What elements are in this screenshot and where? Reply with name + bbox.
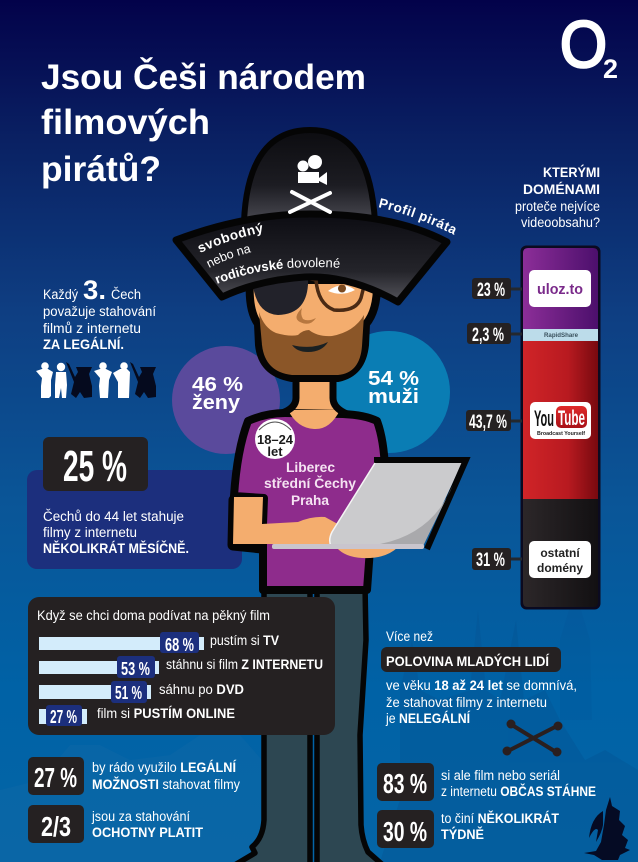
nose	[296, 308, 316, 324]
value: 2,3 %	[467, 323, 511, 346]
bar: TV: pustím si TV	[210, 633, 279, 648]
value: 31 %	[472, 548, 511, 571]
neck	[290, 372, 340, 414]
stat: 30 percent: to činí NĚKOLIKRÁT	[441, 811, 560, 826]
arm outline	[233, 500, 345, 548]
heading: domains	[515, 165, 600, 230]
eye	[328, 285, 355, 294]
title: pirátů?	[41, 150, 161, 189]
pirate hat	[172, 127, 450, 306]
text: every third: považuje stahování	[43, 304, 156, 319]
pirate figure	[172, 127, 470, 862]
segment: YouTube: You	[534, 406, 554, 431]
bar: TV: 68 %	[165, 635, 194, 655]
segment: other domains: ostatní	[540, 546, 580, 560]
bar: online: 27 %	[50, 707, 77, 727]
stat: 83 percent	[377, 763, 596, 801]
circle: men: 54 %	[368, 368, 419, 390]
circle: women: 46 %	[192, 374, 243, 396]
bar: DVD	[39, 681, 244, 703]
title: Jsou Češi národem	[41, 57, 366, 97]
circle: women: ženy	[192, 392, 241, 414]
circle: men	[328, 331, 450, 453]
bar: internet: 53 %	[121, 659, 150, 679]
mouth	[292, 342, 328, 352]
text: every third: Čech	[111, 287, 141, 302]
segment: uloz.to	[529, 270, 591, 307]
segment: YouTube	[530, 402, 591, 439]
brim text: rodičovské dovolené	[215, 258, 340, 284]
neck outline	[282, 374, 347, 414]
value: 43,7 %	[466, 410, 511, 433]
segment: other domains: domény	[537, 561, 583, 575]
circle: men: muži	[368, 386, 419, 408]
panel: 25 percent: NĚKOLIKRÁT MĚSÍČNĚ.	[43, 541, 189, 556]
value: 2,3 %: 2,3 %	[472, 325, 504, 346]
stat: 27 percent: by rádo využilo LEGÁLNÍ	[92, 760, 237, 775]
laptop hand	[337, 548, 397, 558]
laptop	[272, 460, 466, 549]
profile label: Profil piráta	[378, 198, 456, 235]
age badge: 18–24	[257, 432, 294, 447]
regions	[264, 460, 357, 508]
title	[41, 57, 366, 189]
text: half of young people	[381, 629, 577, 726]
segment: YouTube: Broadcast Yourself	[537, 431, 585, 437]
city skyline silhouette	[380, 590, 638, 862]
stat: two thirds: OCHOTNY PLATIT	[92, 825, 204, 840]
bar: TV	[39, 632, 279, 655]
text: every third: filmů z internetu	[43, 321, 141, 336]
stat: 27 percent: MOŽNOSTI stahovat filmy	[92, 777, 240, 792]
brim text: svobodný	[198, 222, 262, 252]
regions: Praha	[291, 493, 329, 508]
age badge: let	[267, 444, 283, 459]
stat: 30 percent	[377, 810, 560, 848]
text: half of young people: Více než	[386, 629, 433, 644]
stat: 30 percent: 30 %	[383, 816, 427, 847]
stat: 83 percent: si ale film nebo seriál	[441, 768, 560, 783]
heading: domains: proteče nejvíce	[515, 199, 600, 214]
circle: women	[172, 346, 280, 454]
stat: two thirds: 2/3	[41, 811, 71, 842]
panel: home film bar chart	[28, 597, 335, 735]
bar: online	[39, 705, 235, 727]
age badge	[255, 419, 295, 459]
text: every third	[43, 275, 156, 352]
segment: YouTube: Tube	[558, 407, 585, 430]
panel: 25 percent: Čechů do 44 let stahuje	[43, 509, 184, 524]
glasses	[307, 278, 373, 310]
text: every third: 3.	[83, 275, 106, 305]
legs	[233, 585, 384, 862]
stat: 30 percent: TÝDNĚ	[441, 827, 484, 842]
bar: internet: stáhnu si film Z INTERNETU	[166, 657, 323, 672]
neckline	[288, 410, 340, 429]
value: 43,7 %: 43,7 %	[469, 412, 507, 433]
segment: RapidShare: RapidShare	[544, 333, 579, 339]
stat: 83 percent: z internetu OBČAS STÁHNE	[441, 784, 596, 799]
eye patch	[252, 276, 308, 315]
stat: 27 percent: 27 %	[34, 762, 77, 793]
chart: domain stacked bar	[466, 246, 600, 610]
text: half of young people: POLOVINA MLADÝCH LIDÍ	[386, 654, 550, 669]
text: half of young people: je NELEGÁLNÍ	[385, 711, 471, 726]
icon: crossbones	[290, 192, 330, 212]
icon: people silhouettes	[36, 362, 156, 398]
bar: DVD: 51 %	[115, 683, 142, 703]
text: half of young people: ve věku 18 až 24 let se domnívá,	[386, 678, 577, 693]
arm	[233, 497, 345, 544]
left skyline silhouette	[0, 735, 262, 862]
value: 23 %: 23 %	[477, 280, 505, 301]
text: every third: ZA LEGÁLNÍ.	[43, 337, 124, 352]
panel: 25 percent: 25 %	[63, 442, 127, 491]
stat: 27 percent	[28, 757, 240, 795]
panel: 25 percent: filmy z internetu	[43, 525, 137, 540]
logo O2: O	[560, 7, 607, 81]
regions: Liberec	[286, 460, 335, 475]
heading: domains: KTERÝMI	[543, 165, 600, 180]
logo O2: 2	[603, 54, 618, 84]
t-shirt	[234, 413, 385, 590]
connector lines	[511, 289, 522, 559]
stat: 83 percent: 83 %	[383, 768, 427, 799]
panel: home film bar chart: Když se chci doma podívat na pěkný film	[37, 608, 270, 623]
value: 23 %	[472, 278, 511, 301]
bar: online: film si PUSTÍM ONLINE	[97, 706, 235, 721]
text: half of young people: že stahovat filmy z internetu	[386, 695, 547, 710]
heading: domains: videoobsahu?	[521, 215, 600, 230]
icon: pirate ship	[584, 797, 630, 860]
text: every third: Každý	[43, 287, 78, 302]
stat: two thirds	[28, 805, 204, 843]
heading: domains: DOMÉNAMI	[523, 182, 600, 197]
segment: uloz.to: uloz.to	[537, 281, 583, 298]
segment: other domains	[529, 541, 591, 578]
stat: two thirds: jsou za stahování	[91, 809, 190, 824]
title: filmových	[41, 103, 210, 142]
beard	[259, 312, 364, 375]
icon: film camera	[298, 155, 327, 185]
brim text: nebo na	[206, 246, 252, 268]
panel: 25 percent	[27, 437, 242, 569]
head	[250, 280, 377, 378]
brim text	[198, 222, 340, 284]
regions: střední Čechy	[264, 476, 357, 491]
bar: internet	[39, 656, 323, 679]
value: 31 %: 31 %	[476, 550, 505, 571]
icon: dark crossbones	[504, 722, 560, 754]
bar: DVD: sáhnu po DVD	[159, 682, 244, 697]
